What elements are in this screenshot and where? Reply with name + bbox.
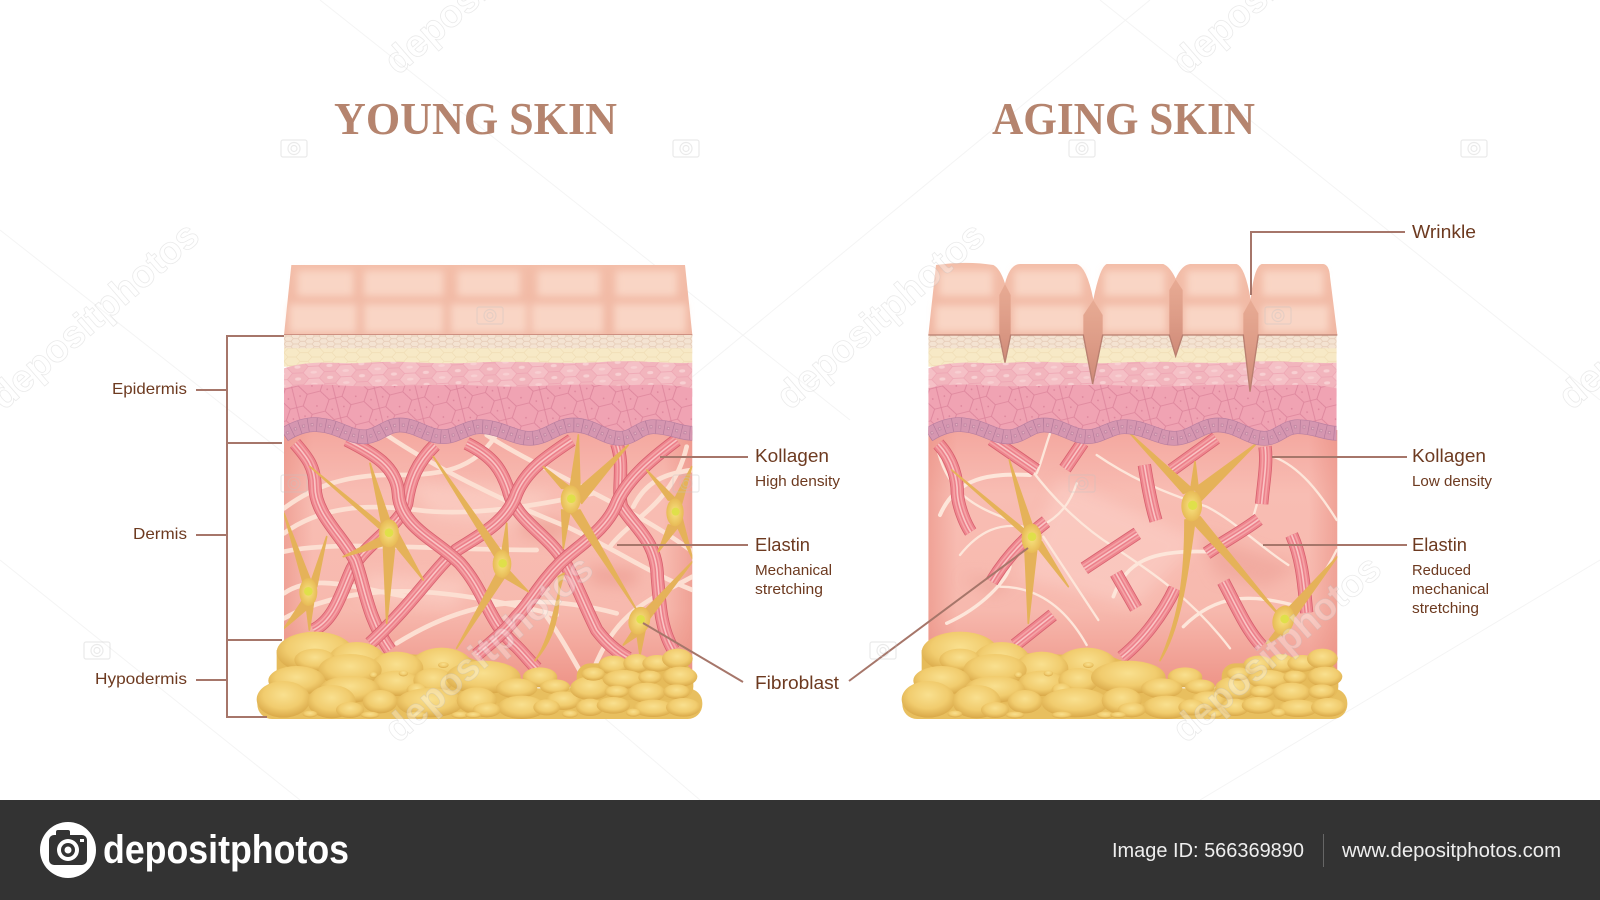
callout: young elastin: Mechanical — [755, 563, 832, 579]
footer image id: Image ID: 566369890 — [1112, 840, 1304, 862]
watermark layer: depositphotos — [376, 547, 602, 751]
footer brand name: depositphotos — [103, 828, 349, 872]
callout: young kollagen: Kollagen — [755, 446, 829, 466]
footer separator — [1323, 834, 1324, 867]
callout: young elastin: stretching — [755, 582, 823, 598]
callout: aging elastin: mechanical — [1412, 582, 1489, 598]
callout: aging elastin: Reduced — [1412, 563, 1471, 579]
callout: young elastin — [617, 535, 832, 598]
young hypodermis fat — [257, 632, 702, 719]
aging hypodermis fat — [902, 632, 1347, 719]
aging dermis background — [928, 430, 1337, 687]
footer url: www.depositphotos.com — [1341, 840, 1561, 862]
callout: aging kollagen: Low density — [1412, 474, 1493, 490]
aging stratum corneum with wrinkles — [928, 263, 1337, 335]
watermark layer: depositphotos — [1164, 547, 1390, 751]
callout: wrinkle — [1251, 222, 1476, 295]
title: aging skin: AGING SKIN — [992, 93, 1255, 144]
callout: fibroblast with two leader lines — [643, 548, 1028, 693]
label: hypodermis: Hypodermis — [95, 671, 187, 688]
callout: fibroblast with two leader lines: Fibroblast — [755, 673, 839, 693]
wrinkle grooves — [928, 279, 1337, 392]
callout: young kollagen — [660, 446, 841, 490]
young dermis background — [284, 430, 692, 687]
callout: young elastin: Elastin — [755, 535, 810, 555]
young elastin fibers — [284, 435, 692, 677]
callout: young kollagen: High density — [755, 474, 841, 490]
aging elastin fibers — [938, 433, 1337, 648]
label: epidermis: Epidermis — [112, 381, 187, 398]
young epidermis layers — [284, 335, 692, 438]
callout: aging kollagen: Kollagen — [1412, 446, 1486, 466]
panel: aging skin cross-section — [902, 263, 1347, 719]
aging fibroblasts — [952, 433, 1337, 661]
callout: aging kollagen — [1272, 446, 1493, 490]
panel: young skin cross-section — [257, 265, 702, 719]
title: young skin: YOUNG SKIN — [334, 93, 617, 144]
label: dermis: Dermis — [133, 526, 187, 543]
callout: wrinkle: Wrinkle — [1412, 222, 1476, 242]
young collagen fibers — [295, 440, 677, 668]
icon: depositphotos logo camera — [40, 822, 96, 878]
young fibroblasts — [284, 435, 692, 661]
footer bar — [0, 800, 1600, 900]
aging collagen fragments — [938, 438, 1307, 657]
young stratum corneum — [284, 265, 692, 335]
callout: aging elastin: Elastin — [1412, 535, 1467, 555]
callout: aging elastin — [1263, 535, 1489, 617]
bracket: skin layers — [196, 336, 284, 717]
callout: aging elastin: stretching — [1412, 601, 1479, 617]
aging epidermis layers — [928, 335, 1337, 438]
watermark layer: depositphotos — [768, 214, 994, 418]
